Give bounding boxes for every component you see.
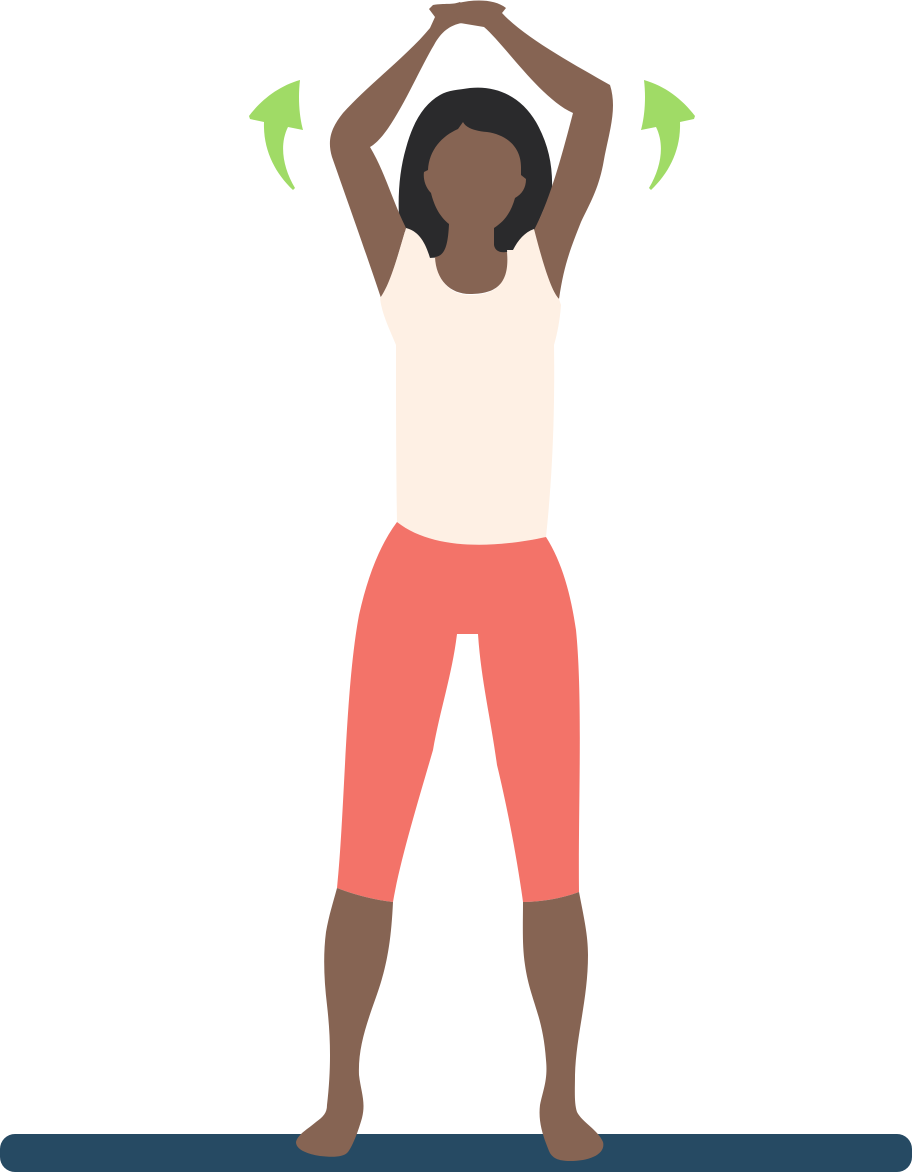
floor mat — [0, 1134, 912, 1172]
icon: right green arrow — [641, 80, 695, 190]
hair — [399, 88, 552, 258]
left arm — [330, 2, 470, 298]
icon: left green arrow — [249, 80, 303, 190]
tank top — [380, 228, 561, 545]
leggings — [337, 522, 580, 902]
right leg and foot — [523, 892, 603, 1161]
arms and hands — [330, 0, 613, 299]
head and neck — [424, 122, 526, 294]
right arm — [452, 0, 613, 299]
left leg and foot — [296, 888, 393, 1157]
